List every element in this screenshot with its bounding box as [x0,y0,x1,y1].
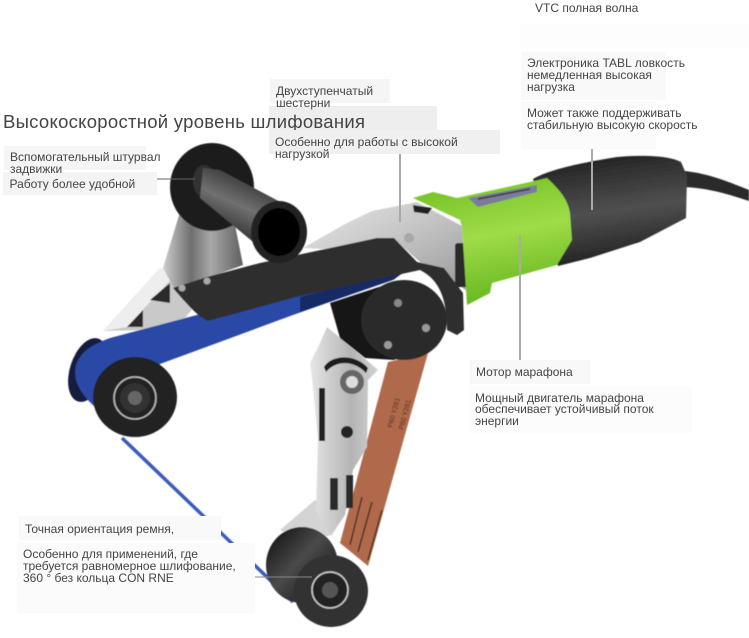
callout: auxiliary handle [3,146,161,195]
callout: two-stage gears: шестерни [276,96,330,110]
blue abrasive belt [75,262,410,408]
callout: two-stage gears [270,79,390,110]
side handle [170,143,307,263]
callout: belt tracking [17,516,255,613]
drive wheel [361,280,447,360]
frame white strip [103,268,177,331]
callout: electronics: Может также поддерживать [527,106,682,120]
lower silver arm [310,327,378,535]
callout: marathon motor: энергии [475,414,519,428]
leader lines [157,148,592,577]
heading backing strip [269,106,437,130]
silver gear housing [303,202,466,290]
front roller [93,357,177,437]
callout: electronics: Электроника TABL ловкость [527,56,685,70]
callout: electronics: стабильную высокую скорость [527,118,698,132]
callout: marathon motor [470,360,692,433]
callout: auxiliary handle: Вспомогательный штурвал [10,150,161,164]
left silver frame [103,268,200,331]
callout: auxiliary handle: задвижки [10,162,62,176]
callout: belt tracking: требуется равномерное шлифование, [23,559,236,573]
dark belt section near drive [300,268,410,312]
callout: two-stage gears: Двухступенчатый [276,84,373,98]
bottom roller disc [294,555,368,627]
callout: electronics: немедленная высокая [527,68,652,82]
callout: auxiliary handle: Работу более удобной [10,177,135,191]
callout: high load [269,130,500,161]
thin back run of the blue belt [122,438,293,602]
heading: Высокоскоростной уровень шлифования [3,111,365,132]
callout: electronics [521,52,698,149]
drive wheel drum [330,285,395,360]
brown abrasive belt: P60 Y281 [398,399,413,431]
frame ribs [127,283,170,327]
callout: high load: нагрузкой [275,147,329,161]
illustration: pipe belt sander [61,143,749,627]
brown abrasive belt: P60 Y281 [387,397,402,429]
handle mount [163,212,243,290]
green motor body [413,178,572,305]
housing slot [413,205,432,214]
callout: VTC [520,1,749,47]
gear ring [455,243,469,287]
callout: marathon motor: Мощный двигатель марафона [475,391,644,405]
power cable [684,171,749,201]
callout: belt tracking: 360 ° без кольца CON RNE [23,571,174,585]
lower silver arm neck [280,500,345,542]
rating label [468,185,537,207]
brown abrasive belt [340,353,428,566]
black guard plate [173,238,464,335]
callout: belt tracking: Точная ориентация ремня, [25,522,174,536]
callout: high load: Особенно для работы с высокой [275,135,458,149]
callout: VTC: VTC полная волна [535,1,639,15]
callout: belt tracking: Особенно для применений, где [23,547,198,561]
callout: electronics: нагрузка [527,80,575,94]
callout: marathon motor: обеспечивает устойчивый поток [475,402,654,416]
bottom roller drum [266,527,338,603]
callout: marathon motor: Мотор марафона [476,365,573,379]
black motor handle [533,156,687,266]
upper rear roller [61,333,115,407]
guard bolts [178,233,414,292]
